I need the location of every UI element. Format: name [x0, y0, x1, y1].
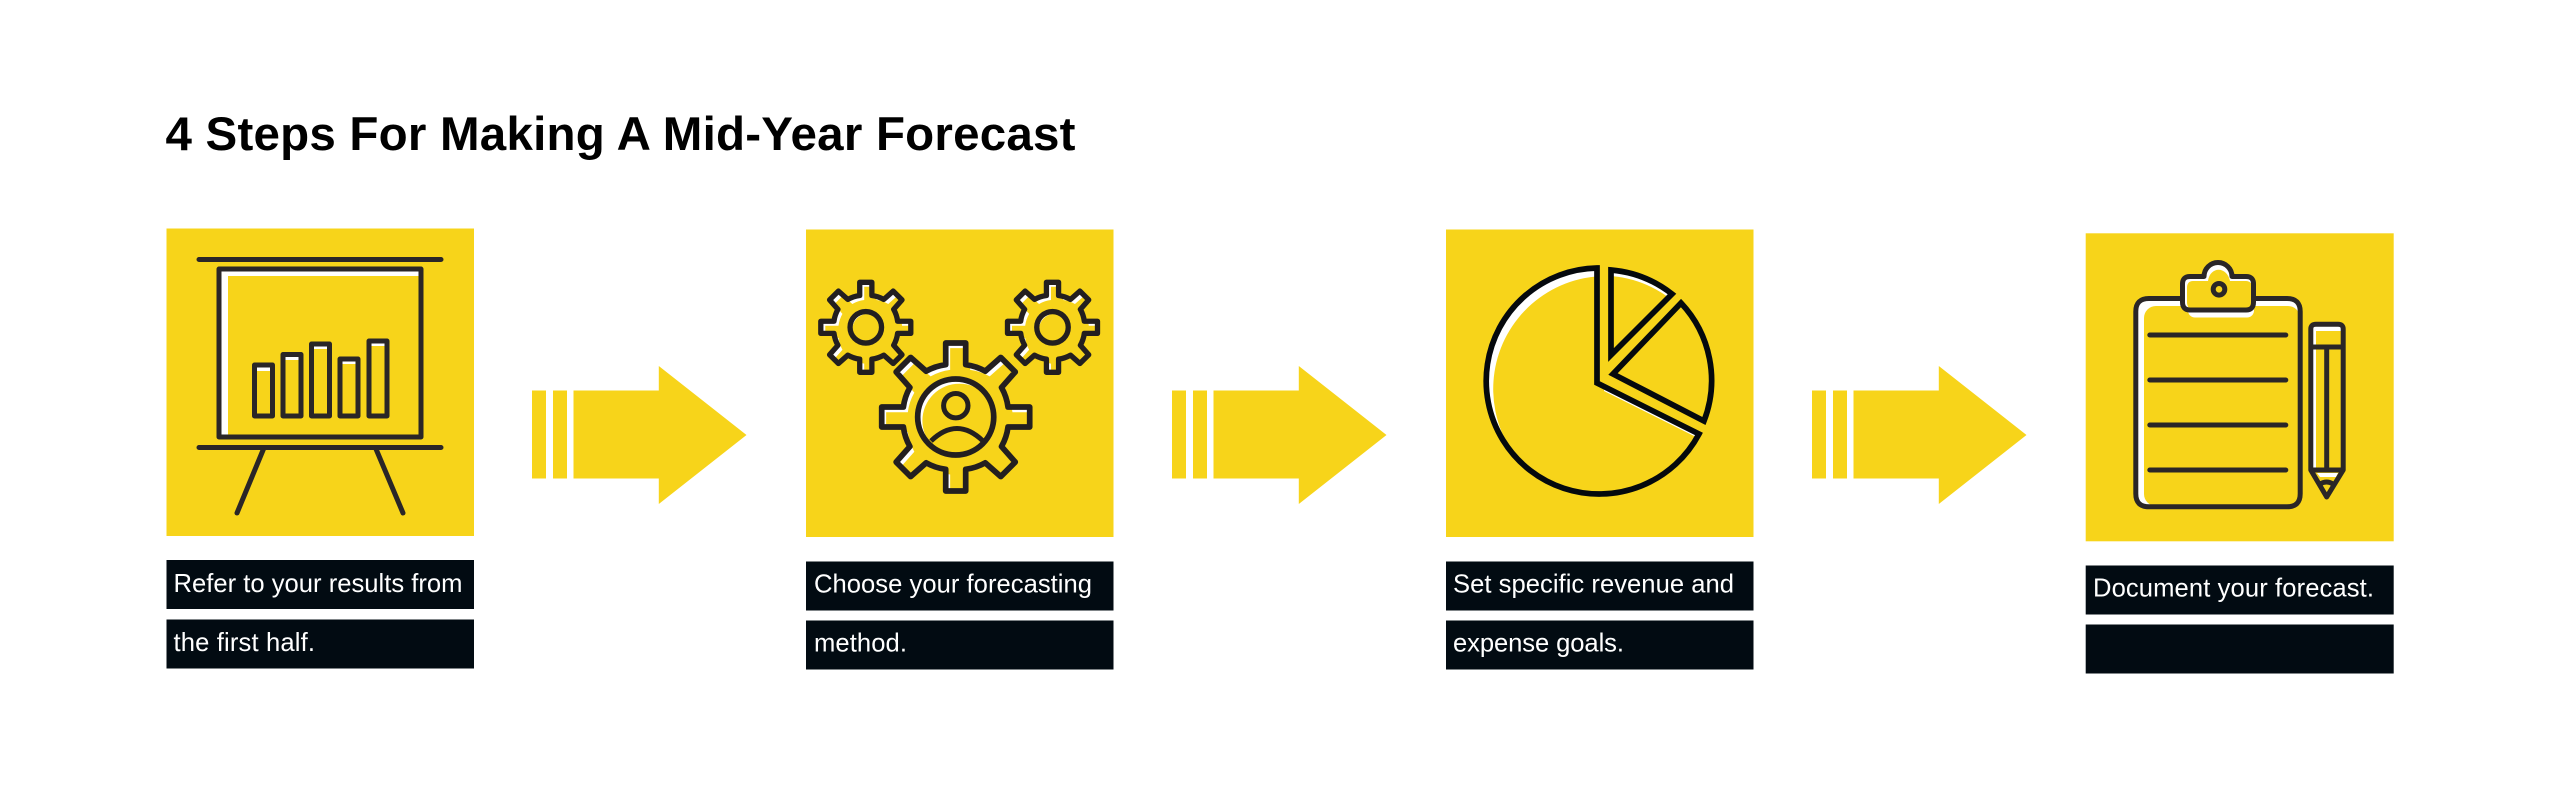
caption: step 2: method. — [814, 630, 907, 658]
yellow tile 3 — [1446, 230, 1754, 537]
yellow tile 1 — [166, 228, 474, 536]
icon: presentation board with bar chart — [199, 260, 441, 513]
caption: step 1: the first half. — [174, 629, 315, 657]
yellow tile 2 — [806, 230, 1114, 537]
yellow tile 4 — [2086, 233, 2394, 541]
caption: step 4 — [2086, 566, 2394, 674]
icon: pie chart — [1483, 265, 1714, 497]
gear centre with person — [878, 340, 1033, 494]
caption: step 1: Refer to your results from — [174, 570, 462, 598]
panel: step 1 results — [166, 228, 474, 536]
panel: step 3 goals — [1446, 230, 1754, 537]
caption: step 2: Choose your forecasting — [814, 571, 1092, 599]
gear right — [1003, 278, 1102, 377]
icon: three gears with person — [816, 278, 1102, 498]
caption: step 3: expense goals. — [1453, 630, 1624, 658]
caption: step 4: Document your forecast. — [2093, 575, 2374, 603]
caption: step 1 — [166, 560, 474, 668]
pencil — [2311, 324, 2343, 497]
arrow 3 — [1812, 366, 2026, 504]
caption: step 3: Set specific revenue and — [1453, 571, 1734, 599]
arrow 2 — [1172, 366, 1386, 504]
title: 4 Steps For Making A Mid-Year Forecast — [166, 108, 1076, 161]
icon: clipboard and pencil — [2136, 262, 2343, 507]
clipboard — [2136, 262, 2300, 507]
gear left — [816, 278, 915, 377]
arrow 1 — [532, 366, 746, 504]
caption: step 2 — [806, 562, 1114, 670]
caption: step 3 — [1446, 562, 1754, 670]
panel: step 2 method — [806, 230, 1114, 537]
panel: step 4 document — [2086, 233, 2394, 541]
